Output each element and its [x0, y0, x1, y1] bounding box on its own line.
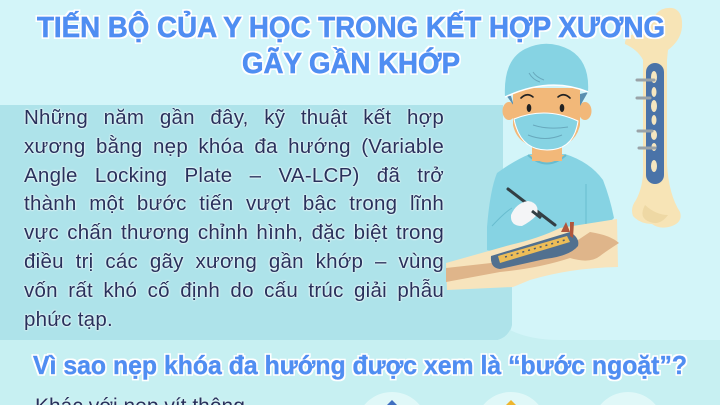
- icon circles row: [364, 392, 656, 405]
- title: [37, 10, 665, 80]
- text block: intro paragraph: Những năm gần đây, kỹ thuật kết hợp: [24, 106, 444, 129]
- text block: intro paragraph: Angle Locking Plate – VA-LCP) đã trở: [24, 164, 444, 187]
- title: GÃY GẦN KHỚP: [242, 46, 460, 80]
- text block: intro paragraph: vốn rất khó cố định do cấu trúc giải phẫu: [24, 279, 444, 302]
- text block: intro paragraph: thành một bước tiến vượt bậc trong lĩnh: [24, 192, 444, 215]
- text block: intro paragraph: xương bằng nẹp khóa đa hướng (Variable: [24, 135, 444, 158]
- surgeon face: [513, 88, 580, 148]
- section heading: Vì sao nẹp khóa đa hướng được xem là “bước ngoặt”?: [33, 350, 687, 380]
- panel: lower section background: [0, 330, 720, 405]
- plate: [491, 232, 578, 269]
- icon: surgeon: [446, 44, 619, 290]
- title: TIẾN BỘ CỦA Y HỌC TRONG KẾT HỢP XƯƠNG: [37, 10, 665, 44]
- text block: intro paragraph: [23, 106, 444, 332]
- text block: intro paragraph: điều trị các gãy xương gần khớp – vùng: [24, 250, 444, 273]
- hand and pen: [508, 189, 555, 225]
- surgeon eyes: [527, 104, 564, 112]
- icon: femur bone with plate: [625, 8, 682, 228]
- text block: intro paragraph: phức tạp.: [24, 308, 113, 331]
- surgeon mask: [514, 113, 578, 150]
- surgeon arm with plate: [446, 219, 618, 290]
- surgeon ears: [502, 102, 592, 120]
- panel: intro background: [0, 105, 512, 340]
- surgeon neck: [532, 145, 562, 161]
- surgeon body: [487, 154, 614, 270]
- surgeon cap: [505, 44, 588, 97]
- text block: intro paragraph: vực chấn thương chỉnh hình, đặc biệt trong: [24, 221, 444, 244]
